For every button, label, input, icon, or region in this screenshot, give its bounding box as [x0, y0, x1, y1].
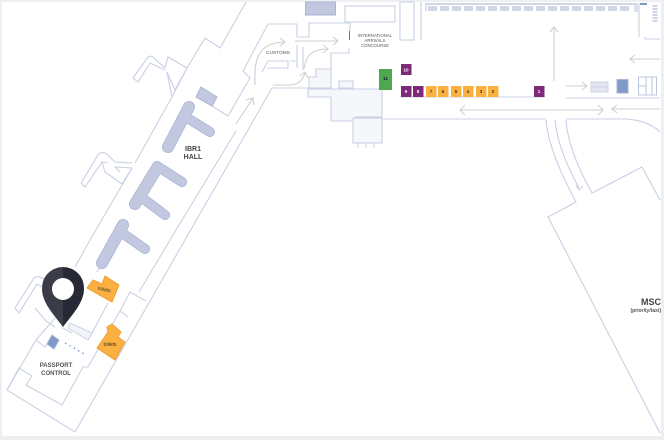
concourse label: CONCOURSE [361, 43, 389, 48]
right side rooms [638, 5, 656, 95]
gate 6: 6 [442, 89, 445, 94]
gate 9 [401, 86, 412, 97]
IBR1 hall label line 2: HALL [184, 154, 203, 161]
piers [102, 107, 210, 263]
gate 10: 10 [403, 68, 409, 72]
MSC label: MSC [641, 297, 662, 307]
gate 3 [476, 86, 486, 97]
lower walls [400, 97, 660, 98]
gate 6 [438, 86, 448, 97]
toilets upper [87, 276, 119, 302]
concourse label: ARRIVALS [365, 38, 386, 43]
gate 5: 5 [455, 89, 458, 94]
gate 2: 2 [492, 89, 495, 94]
passport control label line 2: CONTROL [41, 371, 71, 377]
MSC sublabel: (priority/taxi) [630, 308, 661, 314]
concourse label [358, 33, 393, 48]
gate 7: 7 [430, 89, 433, 94]
top blue block [306, 2, 336, 15]
passport control label: PASSPORT [40, 363, 73, 369]
gate 8: 8 [417, 89, 420, 94]
toilets lower [97, 324, 125, 360]
gate 4: 4 [467, 89, 470, 94]
pier fill [102, 107, 210, 263]
jetties [15, 276, 47, 308]
IBR1 hall label: IBR1 [185, 146, 201, 153]
toilets lower: toilets [103, 342, 117, 348]
top blocks [345, 6, 395, 22]
customs room [262, 61, 288, 72]
gate 4 [463, 86, 474, 97]
escalator [68, 323, 92, 340]
passport desks [65, 343, 86, 355]
gate 3: 3 [480, 89, 483, 94]
gate 1 [534, 86, 544, 97]
blue square service point [617, 80, 628, 93]
gate 11 [379, 69, 392, 90]
gate 7 [426, 86, 436, 97]
hall box [196, 87, 217, 106]
dark tick [349, 31, 350, 40]
seating block [591, 82, 608, 92]
customs label: CUSTOMS [266, 50, 290, 56]
gate 1: 1 [538, 89, 541, 94]
gate markers [379, 64, 544, 97]
passport blue square [47, 335, 59, 349]
location pin [42, 267, 84, 327]
arrows [236, 27, 660, 190]
central building blocks [308, 69, 382, 148]
blue top marker [640, 3, 647, 5]
concourse label: INTERNATIONAL [358, 33, 393, 38]
gate 11: 11 [383, 76, 388, 81]
gate 2 [488, 86, 498, 97]
gate 10 [401, 64, 412, 75]
gate 5 [451, 86, 462, 97]
central concourse [331, 48, 349, 69]
pier outline [102, 107, 210, 263]
top ribbon gates [426, 3, 637, 12]
toilets upper: toilets [97, 286, 112, 294]
gate 9: 9 [405, 89, 408, 94]
gate 8 [413, 86, 424, 97]
